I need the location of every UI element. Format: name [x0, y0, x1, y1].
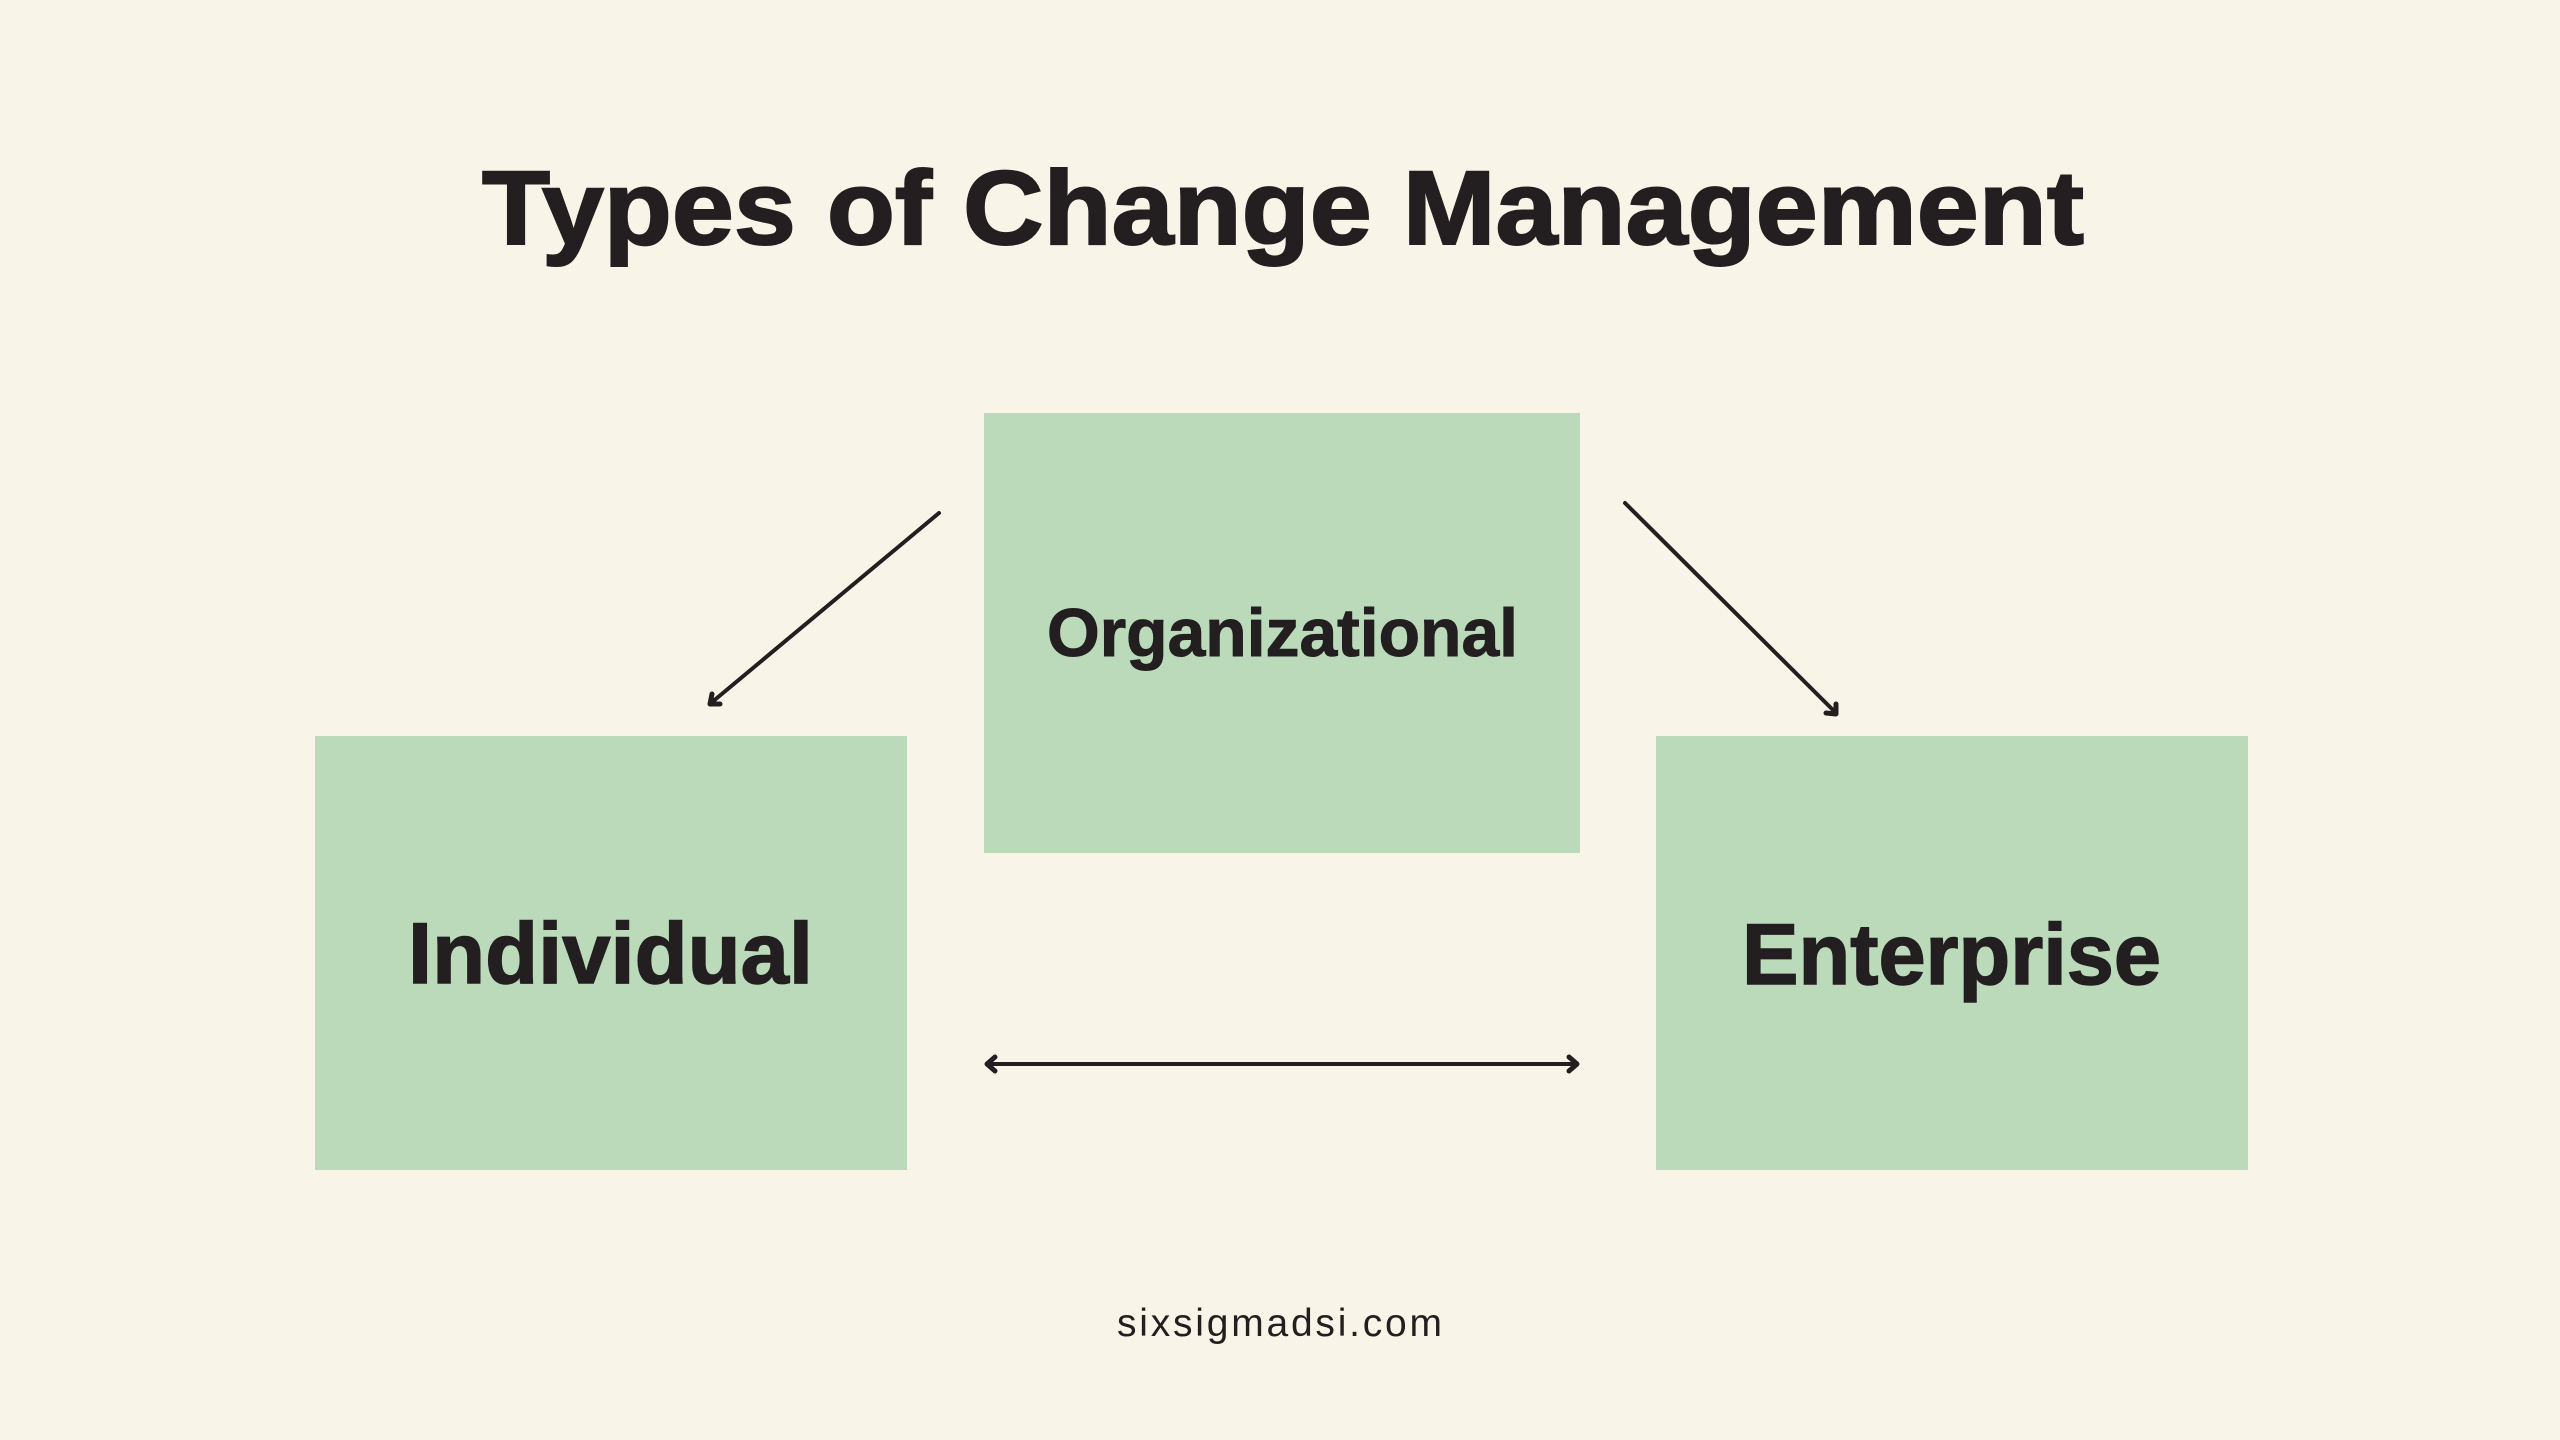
panel: organizational [984, 413, 1580, 853]
arrow: organizational to enterprise [1625, 503, 1836, 714]
individual label: Individual [408, 906, 813, 1002]
arrow: individual and enterprise two-way [987, 1057, 1577, 1071]
title: Types of Change Management [482, 150, 2084, 267]
footer website: sixsigmadsi.com [1117, 1302, 1442, 1345]
organizational label: Organizational [1047, 595, 1518, 671]
panel: individual [315, 736, 907, 1170]
panel: enterprise [1656, 736, 2248, 1170]
organizational box [984, 413, 1580, 853]
individual box [315, 736, 907, 1170]
enterprise box [1656, 736, 2248, 1170]
arrow: organizational to individual [710, 513, 939, 704]
enterprise label: Enterprise [1742, 907, 2161, 1003]
